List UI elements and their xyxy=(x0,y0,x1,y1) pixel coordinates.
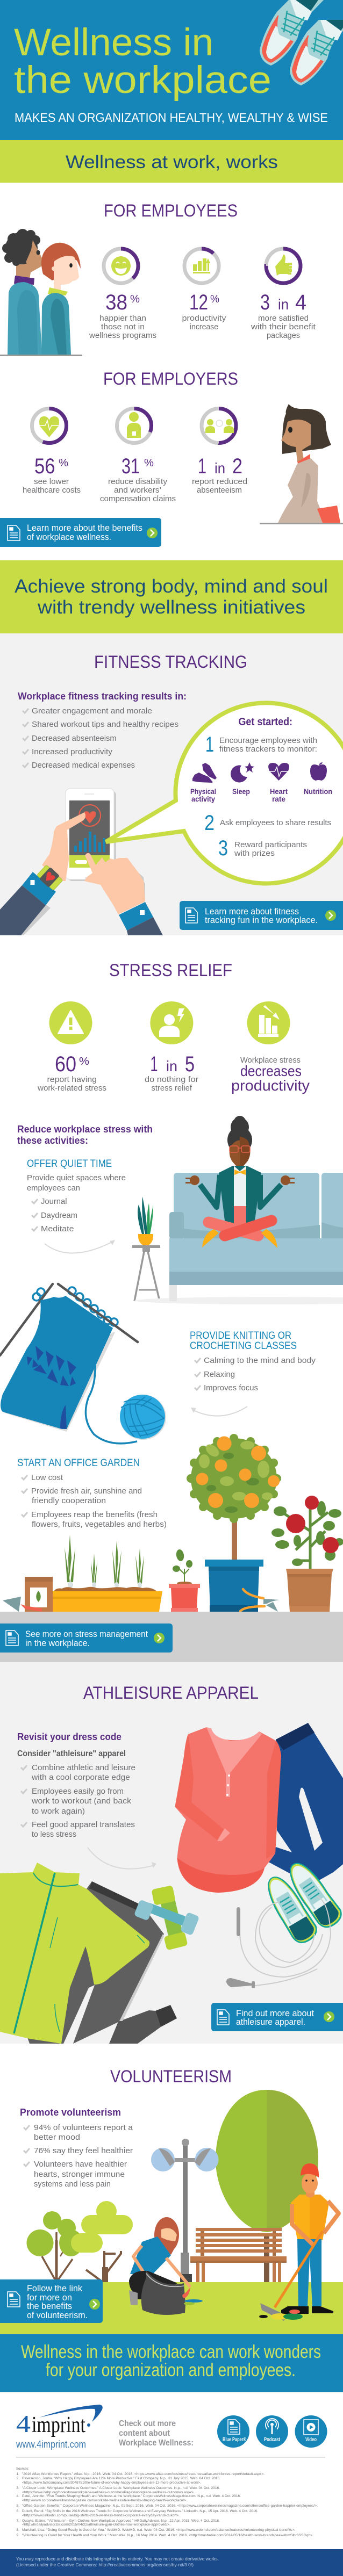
sources list: “Office Garden Benefits.” Corporate Wellness Magazine. N.p., 01 Sept. 2016. Web. 04 Oct. 2016. <http://www.corporatewellnessmagazine.com/others/office-garden-happier-employees/>. xyxy=(22,2504,318,2508)
illustration: sneakers xyxy=(260,1856,343,1947)
icon: arrow xyxy=(147,528,158,538)
stat: 1 in 5: in xyxy=(166,1058,177,1074)
sources list: 9. xyxy=(16,2534,19,2537)
icon: falling bar chart xyxy=(258,1005,280,1037)
illustration: phone and hands xyxy=(0,789,163,935)
button: benefits of volunteerism: Follow the link xyxy=(27,2283,82,2293)
text block: offer quiet time: Meditate xyxy=(41,1224,74,1233)
checklist: fitness results: Greater engagement and morale xyxy=(32,706,152,716)
stat: 1 in 5: stress relief xyxy=(152,1084,192,1093)
sources list: Dukoff, Randi. “Big Shifts in the 2016 Wellness Trends for Corporate Wellness and Everyday Wellness.” LinkedIn. N.p., 15 Apr. 2016. Web. 4 Oct. 2016. xyxy=(22,2509,258,2513)
footer: license xyxy=(0,2549,343,2576)
stat: 12 percent productivity: % xyxy=(210,293,219,305)
sources list: Quayle, Elaine. “‘Athleisure’—Gym Clothes Now Workplace Approved.” HRDailyAdvisor. N.p., 22 Apr. 2015. Web. 4 Oct. 2016. xyxy=(22,2519,220,2523)
button: stress management: See more on stress management xyxy=(25,1629,148,1639)
title: Wellness in xyxy=(14,21,213,64)
stat: 3 in 4 satisfied xyxy=(251,249,316,340)
sources list: 2. xyxy=(16,2477,19,2480)
sources list: <https://www.linkedin.com/pulse/big-shifts-2016-wellness-trends-corporate-everyday-randi-dukoff>. xyxy=(22,2514,180,2517)
stat: 31 percent claims xyxy=(100,408,176,503)
text block: office garden: friendly cooperation xyxy=(32,1496,106,1505)
stat: productivity decrease: productivity xyxy=(231,1077,310,1094)
stat: 3 in 4 satisfied: more satisfied xyxy=(258,314,309,323)
illustration: garden xyxy=(3,1434,343,1612)
stat: 60 percent stress: work-related stress xyxy=(37,1084,106,1093)
callout: get started speech bubble: fitness trackers to monitor: xyxy=(219,745,317,754)
icon: running shoes xyxy=(260,0,343,85)
text block: dress code: Combine athletic and leisure xyxy=(32,1763,135,1772)
text block: knitting classes: Relaxing xyxy=(204,1370,235,1379)
text block: offer quiet time xyxy=(27,1158,126,1233)
icon: arrow xyxy=(324,2011,334,2022)
text block: dress code: Consider "athleisure" apparel xyxy=(17,1749,126,1758)
text block: promote volunteerism: systems and less pain xyxy=(34,2180,111,2189)
icon labels: Physical xyxy=(190,788,216,796)
stat: 31 percent claims: % xyxy=(144,457,154,469)
icon labels: Sleep xyxy=(232,788,250,796)
stat: 1 in 2 absenteeism: absenteeism xyxy=(197,486,242,495)
text block: offer quiet time: Daydream xyxy=(41,1211,77,1220)
sources list: <https://www.fastcompany.com/3048751/the-future-of-work/why-happy-employees-are-12-more-productive-at-work>. xyxy=(22,2481,201,2485)
text block: knitting classes: Calming to the mind and body xyxy=(204,1356,316,1365)
sources list: <http://www.corporatewellnessmagazine.com/worksite-wellness/five-trends-shaping-health-workplace/>. xyxy=(22,2499,187,2502)
stat: 1 in 2 absenteeism: 2 xyxy=(232,454,242,478)
panel: athleisure apparel xyxy=(0,1662,343,2044)
icon: document xyxy=(217,2010,229,2025)
logo: 4imprint: www.4imprint.com xyxy=(16,2439,86,2450)
icon: person with lightning xyxy=(159,1008,184,1037)
heading band: wellness at work xyxy=(0,140,343,183)
icon labels xyxy=(190,788,332,803)
sources list: <https://www.ifebp.org/bookstore/workplace-wellness-outcomes/Pages/workplace-wellness-outcomes.aspx>. xyxy=(22,2491,195,2494)
button: benefits of workplace wellness: Learn more about the benefits xyxy=(27,523,142,533)
text block: promote volunteerism xyxy=(20,2107,133,2189)
button: stress management xyxy=(0,1623,173,1653)
text block: office garden: flowers, fruits, vegetables and herbs) xyxy=(32,1520,167,1529)
panel: hero xyxy=(0,0,343,140)
stat: 1 in 2 absenteeism: in xyxy=(215,460,225,477)
stat: 12 percent productivity xyxy=(182,249,226,331)
onion planter xyxy=(53,1535,162,1612)
heading: athleisure: ATHLEISURE APPAREL xyxy=(83,1683,259,1702)
text block: dress code: Revisit your dress code xyxy=(17,1731,122,1742)
stat: 60 percent stress xyxy=(37,1001,106,1093)
text block: promote volunteerism: better mood xyxy=(34,2133,80,2142)
heading: stress relief: STRESS RELIEF xyxy=(109,961,232,980)
icon: video: Video xyxy=(305,2437,317,2443)
illustration: green jacket xyxy=(0,1863,149,2044)
stat: productivity decrease xyxy=(231,1001,310,1094)
callout: get started speech bubble: 2 xyxy=(204,811,215,835)
stat: 56 percent healthcare: 56 xyxy=(34,454,55,478)
icon: warning triangle xyxy=(58,1011,83,1034)
callout: get started speech bubble: 1 xyxy=(205,733,214,756)
sources list: “2016 Aflac Workforces Report.” Aflac. N.p., 2016. Web. 04 Oct. 2016. <https://www.aflac.com/business/resources/aflac-workforces-report/default.aspx>. xyxy=(22,2472,265,2476)
stat: 12 percent productivity: increase xyxy=(190,322,218,331)
text block: promote volunteerism: Promote volunteerism xyxy=(20,2107,121,2118)
sources list: 3. xyxy=(16,2486,19,2490)
text block: knitting classes: PROVIDE KNITTING OR xyxy=(190,1330,291,1341)
stat: 3 in 4 satisfied: with their benefit xyxy=(251,322,316,331)
button: benefits of volunteerism: the benefits xyxy=(27,2301,72,2311)
illustration: plant on side table xyxy=(132,1196,160,1301)
closing band: for your organization and employees. xyxy=(46,2360,296,2380)
sources list: 8. xyxy=(16,2528,19,2532)
stat: 3 in 4 satisfied: in xyxy=(278,296,289,313)
closing band xyxy=(0,2334,343,2392)
icon labels: activity xyxy=(191,795,215,803)
text: check out more content: Check out more xyxy=(119,2419,176,2428)
callout: get started speech bubble: 3 xyxy=(218,836,228,860)
heading band: achieve strong body xyxy=(0,560,343,633)
sources list: 1. xyxy=(16,2472,19,2476)
sources list: 6. xyxy=(16,2509,19,2513)
panel: fitness tracking xyxy=(0,633,343,935)
sources list: Marshall, Lisa. “Doing Good Really Is Good for You.” WebMD. WebMD, n.d. Web. 04 Oct. 2016. <http://www.webmd.com/balance/features/volunteering-physical-benefits>. xyxy=(22,2528,295,2532)
sources list: 5. xyxy=(16,2504,19,2508)
small red pot with seedling xyxy=(169,1549,200,1612)
icon: blue paper xyxy=(217,2415,249,2448)
text block: offer quiet time: Journal xyxy=(41,1197,67,1206)
text block: promote volunteerism: 94% of volunteers report a xyxy=(34,2123,133,2132)
arrow: to shirt xyxy=(88,1848,156,1869)
heading band: achieve strong body: with trendy wellness initiatives xyxy=(37,597,305,618)
stat: 1 in 5 xyxy=(145,1001,198,1093)
shelf xyxy=(0,1612,343,1662)
sources list xyxy=(16,2467,318,2537)
icon: document xyxy=(185,908,197,923)
subheading: reduce workplace stress: Reduce workplace stress with xyxy=(17,1124,153,1135)
icon: three people, one absent xyxy=(205,419,234,433)
seed packet and trowel xyxy=(3,1577,53,1612)
text block: dress code: to less stress xyxy=(32,1830,76,1839)
sources list: “A Closer Look: Workplace Wellness Outcomes.” A Closer Look: Workplace Wellness Outcomes. N.p., n.d. Web. 04 Oct. 2016. xyxy=(22,2486,220,2490)
stat: 31 percent claims: compensation claims xyxy=(100,494,176,503)
illustration: employer woman xyxy=(260,404,343,524)
illustration: two employees xyxy=(0,229,82,356)
logo: 4imprint xyxy=(16,2405,103,2450)
big tree xyxy=(216,2090,318,2232)
illustration: jump rope xyxy=(226,1896,331,1988)
text: check out more content: Workplace Wellness: xyxy=(119,2438,194,2448)
stat: 38 percent happier: those not in xyxy=(101,322,145,331)
stat: 12 percent productivity: productivity xyxy=(182,314,226,323)
text block: dress code: work to workout (and back xyxy=(31,1796,132,1806)
stat: 56 percent healthcare xyxy=(23,408,81,495)
stat: 1 in 5: 1 xyxy=(151,1052,158,1076)
illustration: shorts and water bottle xyxy=(27,1881,177,2044)
sources list: Sources: xyxy=(16,2467,29,2471)
icon: blue paper: Blue Paper® xyxy=(223,2437,246,2443)
text block: office garden: Employees reap the benefits (fresh xyxy=(31,1510,158,1519)
text block: offer quiet time: Provide quiet spaces where xyxy=(27,1173,126,1182)
text block: dress code: with a cool corporate edge xyxy=(31,1773,130,1782)
text block: dress code: Employees easily go from xyxy=(32,1787,124,1796)
icon labels: Heart xyxy=(270,788,288,796)
stat: productivity decrease: Workplace stress xyxy=(240,1056,301,1065)
button: benefits of workplace wellness: of workplace wellness. xyxy=(27,532,111,542)
text block: promote volunteerism: Volunteers have healthier xyxy=(34,2160,127,2169)
stat: 3 in 4 satisfied: 4 xyxy=(295,291,306,314)
callout: get started speech bubble: Get started: xyxy=(239,716,292,728)
stat: 31 percent claims: 31 xyxy=(122,454,140,478)
heading: volunteerism: VOLUNTEERISM xyxy=(110,2067,232,2086)
sources list: 4. xyxy=(16,2494,19,2498)
stat: 1 in 2 absenteeism: 1 xyxy=(198,454,206,478)
icon: video xyxy=(295,2415,327,2448)
button: fitness tracking fun: Learn more about fitness xyxy=(205,906,299,917)
stat: 3 in 4 satisfied: 3 xyxy=(260,291,270,314)
stat: 56 percent healthcare: healthcare costs xyxy=(23,486,81,495)
stat: 56 percent healthcare: see lower xyxy=(34,477,69,486)
icon: heart with pulse xyxy=(39,416,60,437)
heading: fitness tracking: FITNESS TRACKING xyxy=(94,652,247,672)
footer: license: You may reproduce and distribute this infographic in its entirety. You may not create derivative works. xyxy=(16,2556,219,2561)
title xyxy=(14,21,271,102)
callout: get started speech bubble: with prizes xyxy=(234,849,275,858)
icon: document xyxy=(8,525,20,540)
checklist: fitness results: Decreased medical expenses xyxy=(32,761,135,770)
icon: thumbs up xyxy=(275,255,292,276)
pruning shears xyxy=(240,1589,280,1612)
icon: arrow xyxy=(154,1633,165,1643)
illustration: knitting and yarn xyxy=(0,1284,166,1444)
subheading: reduce workplace stress xyxy=(17,1124,153,1146)
sources list: <http://hrdailyadvisor.blr.com/2015/04/22/athleisure-gym-clothes-now-workplace-approved/>. xyxy=(22,2523,170,2527)
volunteer man with rake xyxy=(259,2163,339,2321)
text block: office garden: Low cost xyxy=(31,1473,63,1482)
stat: 38 percent happier: happier than xyxy=(99,314,146,323)
text: check out more content xyxy=(119,2419,194,2448)
logo: 4imprint: 4 xyxy=(16,2411,31,2437)
text block: dress code xyxy=(17,1731,135,1839)
button: athleisure apparel: athleisure apparel. xyxy=(236,2017,305,2027)
illustration: volunteer park scene xyxy=(0,2090,343,2334)
illustration: navy pants xyxy=(266,1723,343,1881)
button: athleisure apparel: Find out more about xyxy=(236,2008,314,2018)
text block: offer quiet time: OFFER QUIET TIME xyxy=(27,1158,112,1170)
checklist: fitness results xyxy=(23,706,178,770)
stat: 56 percent healthcare: % xyxy=(59,457,68,469)
stat: 38 percent happier: 38 xyxy=(105,291,127,314)
illustration: sofa and meditating woman xyxy=(134,1116,343,1304)
text block: knitting classes: Improves focus xyxy=(204,1383,258,1392)
illustration: coral shirt xyxy=(175,1727,281,1893)
sources list: “Volunteering Is Good for Your Health and Your Work.” Mashable. N.p., 16 May 2014. Web. 4 Oct. 2016. <http://mashable.com/2014/05/16/health-work-brandspeak/#bmSlbr6SSGqh>. xyxy=(22,2534,313,2537)
icon: arrow xyxy=(89,2299,100,2310)
heading band: wellness at work: Wellness at work, works xyxy=(66,152,278,172)
sources list: Patel, Jennifer. “Five Trends Shaping Health and Wellness at the Workplace.” CorporateWellnessMagazine.com. N.p., n.d. Web. 4 Oct. 2016. xyxy=(22,2494,241,2498)
arrow: to sofa xyxy=(45,1240,115,1253)
text block: office garden: Provide fresh air, sunshine and xyxy=(31,1487,142,1496)
sources list: 7. xyxy=(16,2519,19,2523)
footer: license: (Licensed under the Creative Commons: http://creativecommons.org/licenses/by-nd/3.0/) xyxy=(16,2562,194,2567)
text block: office garden xyxy=(17,1457,167,1529)
button: benefits of volunteerism xyxy=(0,2279,103,2323)
tomato plant xyxy=(271,1496,343,1612)
stat: 38 percent happier: % xyxy=(130,293,140,305)
stat: 38 percent happier xyxy=(89,249,156,340)
button: benefits of volunteerism: of volunteerism. xyxy=(27,2310,88,2320)
stat: 12 percent productivity: 12 xyxy=(189,291,208,314)
stat: 60 percent stress: % xyxy=(79,1056,89,1067)
text block: promote volunteerism: 76% say they feel healthier xyxy=(34,2146,133,2155)
checklist: fitness results: Decreased absenteeism xyxy=(32,734,116,743)
arrow: to yarn xyxy=(191,1406,247,1416)
stat: 3 in 4 satisfied: packages xyxy=(267,331,300,340)
text block: offer quiet time: employees can xyxy=(27,1184,80,1193)
callout: get started speech bubble xyxy=(106,703,343,883)
stat: productivity decrease: decreases xyxy=(240,1063,302,1079)
icon: apple xyxy=(310,762,327,781)
button: athleisure apparel xyxy=(211,2003,343,2031)
button: benefits of workplace wellness xyxy=(0,518,161,547)
checklist: fitness results: Shared workout tips and healthy recipes xyxy=(32,720,178,729)
icon labels: rate xyxy=(272,795,285,803)
text block: office garden: START AN OFFICE GARDEN xyxy=(17,1457,140,1469)
icon: arrow xyxy=(325,910,336,921)
callout: get started speech bubble: Encourage employees with xyxy=(219,736,317,745)
checklist: fitness results: Increased productivity xyxy=(32,747,113,756)
icon: heart with pulse xyxy=(268,763,289,781)
icon: podcast: Podcast xyxy=(264,2437,281,2443)
button: fitness tracking fun: tracking fun in the workplace. xyxy=(205,915,318,925)
icon labels: Nutrition xyxy=(304,788,332,796)
icon: rising bar chart xyxy=(193,258,210,273)
illustration: dumbbells xyxy=(134,1885,199,1950)
icon: sneakers xyxy=(192,763,217,783)
callout: get started speech bubble: Ask employees to share results xyxy=(220,818,331,827)
stat: 38 percent happier: wellness programs xyxy=(89,331,156,340)
icon: podcast xyxy=(256,2415,288,2448)
stat: 60 percent stress: 60 xyxy=(55,1052,76,1076)
subheading: results: Workplace fitness tracking results in: xyxy=(18,691,187,702)
lamp post xyxy=(151,2139,218,2282)
button: benefits of volunteerism: for more on xyxy=(27,2292,72,2303)
heading: for employees: FOR EMPLOYEES xyxy=(104,201,238,220)
callout: get started speech bubble: Reward participants xyxy=(234,840,307,849)
heading: for employers: FOR EMPLOYERS xyxy=(103,369,238,388)
stat: 60 percent stress: report having xyxy=(47,1075,97,1084)
text block: dress code: Feel good apparel translates xyxy=(32,1820,135,1829)
stat: 1 in 5: 5 xyxy=(185,1052,195,1076)
stat: 31 percent claims: reduce disability xyxy=(108,477,168,486)
stat: 31 percent claims: and workers’ xyxy=(114,486,161,495)
icon: document xyxy=(6,1630,18,1646)
text: check out more content: content about xyxy=(119,2429,170,2438)
button: stress management: in the workplace. xyxy=(25,1638,90,1648)
text block: knitting classes xyxy=(190,1330,316,1392)
small trees xyxy=(27,2201,133,2283)
title: the workplace xyxy=(14,59,271,102)
icon: document xyxy=(8,2292,20,2307)
text block: dress code: to work again) xyxy=(32,1807,85,1816)
text block: knitting classes: CROCHETING CLASSES xyxy=(190,1340,297,1352)
sources list: Revesencio, Jonha. “Why Happy Employees Are 12% More Productive.” Fast Company. N.p., 31 July 2015. Web. 04 Oct. 2016. xyxy=(22,2477,220,2480)
subheading: reduce workplace stress: these activities: xyxy=(17,1135,88,1146)
orange tree xyxy=(187,1434,281,1560)
blue pot xyxy=(205,1560,263,1612)
volunteer woman xyxy=(129,2217,203,2315)
text block: promote volunteerism: hearts, stronger immune xyxy=(34,2170,125,2179)
button: fitness tracking fun xyxy=(180,901,343,930)
icon: worker with document xyxy=(127,412,141,438)
stat: 1 in 2 absenteeism: report reduced xyxy=(192,477,247,486)
icon: moon and star xyxy=(231,762,254,782)
bench xyxy=(190,2228,287,2282)
stat: 1 in 5: do nothing for xyxy=(145,1075,198,1084)
icon: smile xyxy=(111,256,131,276)
ground xyxy=(0,2282,343,2334)
logo: 4imprint: imprint xyxy=(32,2413,85,2437)
heading band: achieve strong body: Achieve strong body, mind and soul xyxy=(15,576,328,597)
stat: 1 in 2 absenteeism xyxy=(192,408,247,495)
